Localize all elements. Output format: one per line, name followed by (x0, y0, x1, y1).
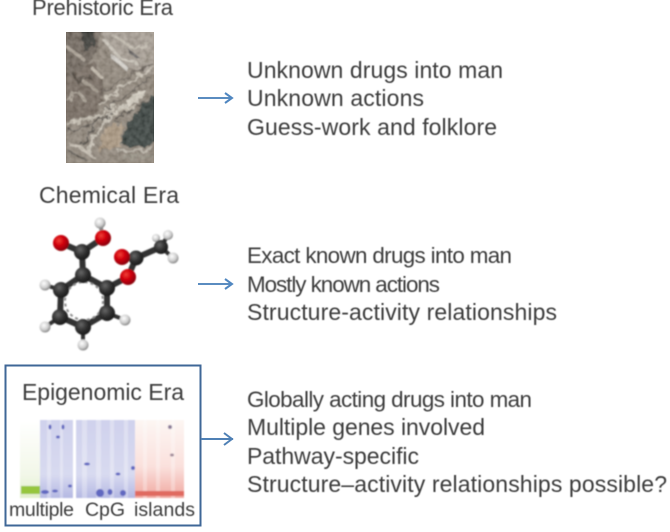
text block: epigenomic era: Globally acting drugs into man (247, 387, 532, 412)
image: rock cave photograph (66, 32, 154, 163)
panel: epigenomic era (6, 366, 200, 526)
arrow: chemical era to text (198, 279, 232, 289)
text block: epigenomic era: Multiple genes involved (247, 414, 485, 440)
caption: multiple CpG islands: islands (134, 499, 195, 521)
text block: epigenomic era: Pathway-specific (247, 443, 419, 469)
heading: Epigenomic Era: Epigenomic Era (22, 379, 184, 405)
text block: prehistoric era: Guess-work and folklore (247, 114, 497, 140)
arrow: epigenomic era to text (201, 433, 233, 445)
text block: chemical era: Exact known drugs into man (247, 243, 512, 268)
text block: prehistoric era: Unknown drugs into man (247, 57, 503, 83)
caption: multiple CpG islands (9, 499, 195, 521)
arrow: prehistoric era to text (198, 93, 232, 103)
heading: Chemical Era: Chemical Era (39, 182, 179, 208)
text block: chemical era: Mostly known actions (247, 272, 440, 297)
text block: epigenomic era (247, 387, 667, 497)
text block: prehistoric era (247, 57, 503, 140)
text block: chemical era (247, 243, 557, 325)
caption: multiple CpG islands: CpG (85, 499, 125, 521)
panel frame (6, 366, 200, 526)
text block: epigenomic era: Structure–activity relationships possible? (247, 471, 667, 497)
icon: aspirin ball-and-stick molecule (40, 218, 178, 350)
caption: multiple CpG islands: multiple (9, 499, 74, 521)
text block: chemical era: Structure-activity relationships (247, 299, 557, 325)
chart: multiple CpG islands sequencing lanes (20, 420, 184, 498)
text block: prehistoric era: Unknown actions (247, 85, 424, 111)
